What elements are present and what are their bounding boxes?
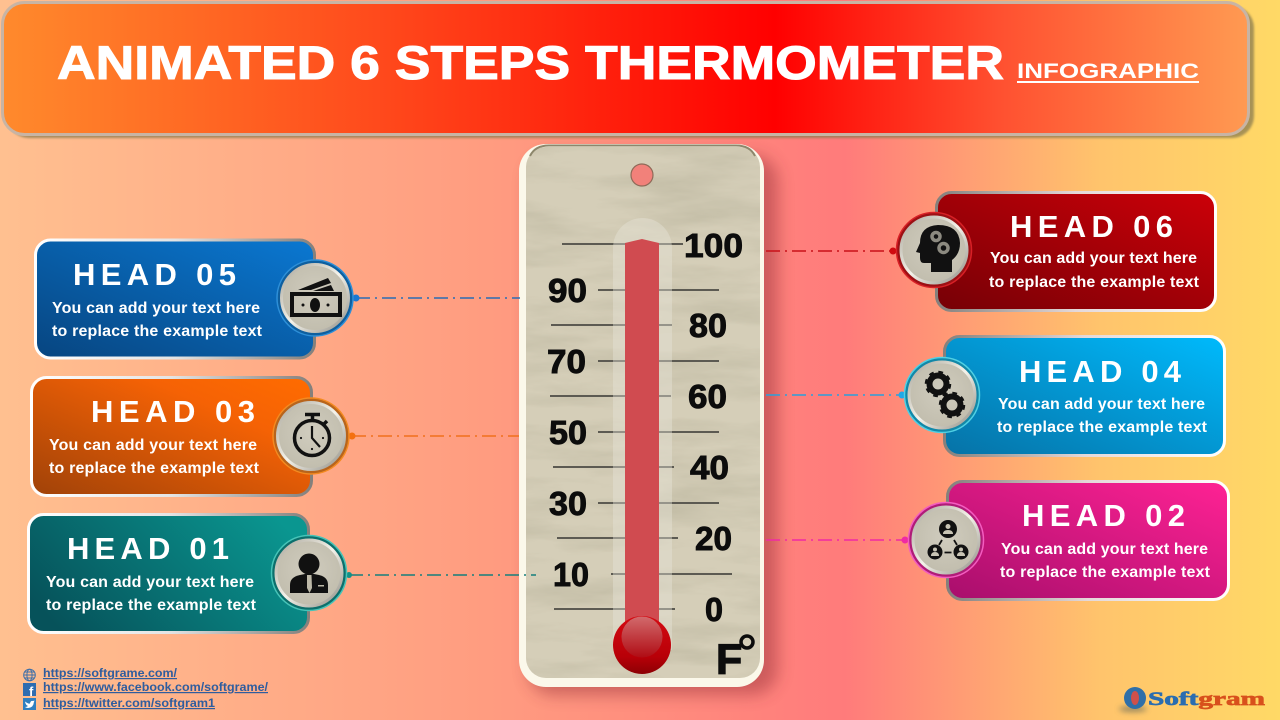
scale numbers: 10: [553, 556, 589, 593]
body text: You can add your text here: [990, 250, 1197, 267]
link text: https://softgrame.com/: [43, 666, 178, 680]
subtitle text: INFOGRAPHIC: [1017, 60, 1199, 83]
title text: ANIMATED 6 STEPS THERMOMETER: [57, 36, 1004, 89]
footer links: https://www.facebook.com/softgrame/: [43, 680, 269, 694]
title banner: [2, 2, 1254, 138]
logo: Softgram: Soft gram: [1148, 689, 1265, 710]
scale numbers: 100: [684, 227, 743, 264]
icon: businessman: [272, 536, 346, 610]
scale numbers: 30: [549, 485, 587, 522]
tick marks: [550, 244, 732, 609]
icon: facebook: [23, 683, 36, 699]
body text: to replace the example text: [52, 323, 263, 340]
panel: head 02: [908, 482, 1228, 600]
heading: HEAD 01: [67, 531, 229, 566]
panel: head 05: [36, 240, 353, 358]
scale numbers: 50: [549, 414, 587, 451]
scale numbers: 90: [548, 272, 587, 309]
scale numbers: [547, 227, 743, 628]
panel: head 06: [896, 192, 1216, 310]
body text: You can add your text here: [1001, 541, 1208, 558]
body text: to replace the example text: [49, 460, 260, 477]
scale numbers: 70: [547, 343, 586, 380]
scale numbers: 20: [695, 520, 732, 557]
connector: head 06: [766, 248, 896, 254]
icon: twitter: [23, 698, 36, 710]
body text: [52, 300, 263, 340]
connector: head 05: [352, 294, 520, 302]
connector: head 02: [766, 536, 908, 544]
body text: You can add your text here: [52, 300, 260, 317]
scale numbers: 60: [688, 378, 727, 415]
thermometer: [519, 144, 778, 695]
icon: globe: [24, 669, 35, 681]
icon: head with gears: [896, 212, 972, 288]
heading: HEAD 02: [1022, 498, 1185, 533]
heading: HEAD 05: [73, 257, 236, 292]
footer links: https://twitter.com/softgram1: [43, 696, 215, 710]
panel: head 03: [32, 378, 349, 496]
glass tube: [613, 218, 672, 650]
heading: HEAD 03: [91, 394, 255, 429]
icon: facebook: f: [29, 684, 34, 699]
scale numbers: 0: [705, 591, 723, 628]
panel: head 04: [904, 336, 1224, 456]
scale numbers: 40: [690, 449, 729, 486]
unit label: F: [716, 636, 742, 684]
icon: stopwatch: [273, 398, 349, 474]
body text: [997, 396, 1208, 436]
icon: banknotes: [277, 260, 353, 336]
body text: You can add your text here: [998, 396, 1205, 413]
panel: head 01: [28, 514, 346, 632]
body text: to replace the example text: [989, 274, 1200, 291]
logo: Softgram: [1119, 687, 1265, 712]
heading: HEAD 06: [1010, 209, 1173, 244]
connector: head 01: [346, 572, 536, 578]
body text: to replace the example text: [997, 419, 1208, 436]
body text: [1000, 541, 1211, 581]
body text: You can add your text here: [46, 574, 254, 591]
connector: head 04: [766, 392, 906, 398]
body text: You can add your text here: [49, 437, 257, 454]
body text: [46, 574, 257, 614]
scale numbers: 80: [689, 307, 727, 344]
body text: to replace the example text: [1000, 564, 1211, 581]
footer links: [23, 666, 269, 710]
body text: to replace the example text: [46, 597, 257, 614]
icon: network of people: [908, 502, 984, 578]
mercury column: [625, 239, 659, 630]
connector: head 03: [348, 432, 519, 440]
heading: HEAD 04: [1019, 354, 1182, 389]
icon: gears: [904, 358, 980, 432]
hanging hole: [631, 164, 653, 186]
body text: [989, 250, 1200, 291]
body text: [49, 437, 260, 477]
bulb: [613, 616, 671, 674]
